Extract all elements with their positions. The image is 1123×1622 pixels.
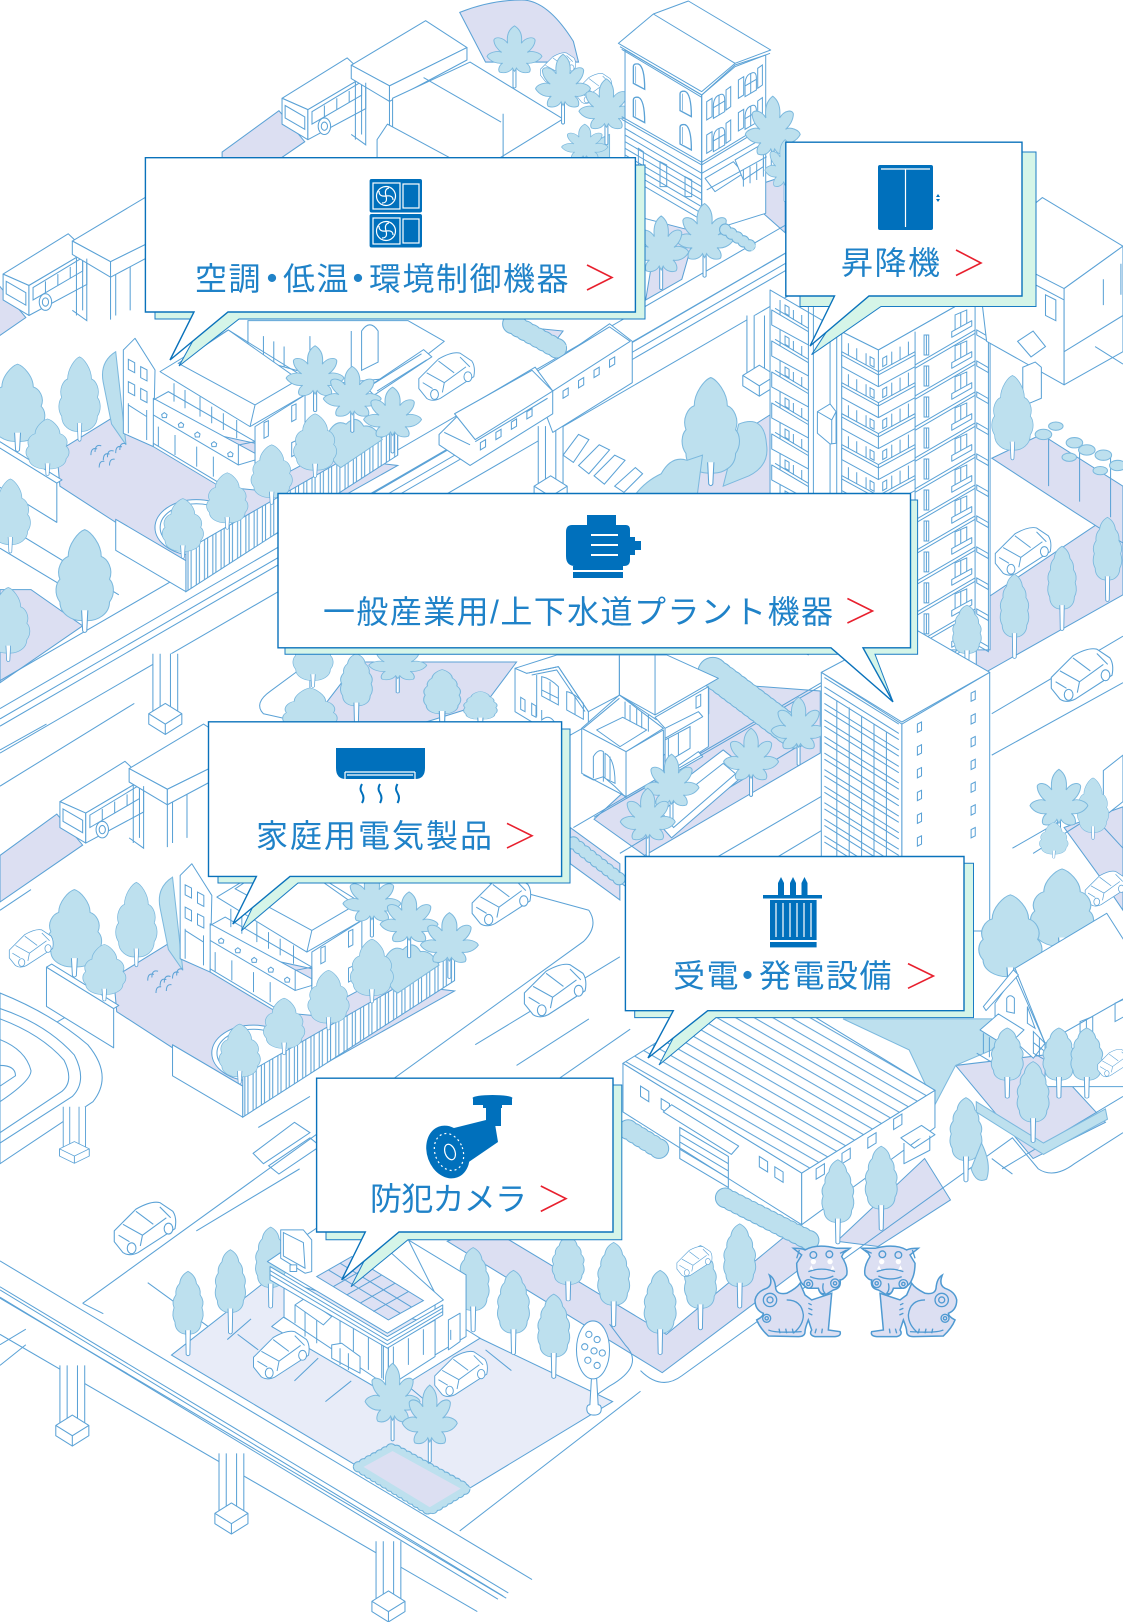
arrow bbox=[507, 823, 532, 848]
icon: transformer bbox=[763, 877, 822, 947]
icon: motor bbox=[566, 515, 641, 578]
small lot with maples bbox=[620, 697, 826, 856]
label: air conditioning: ・ bbox=[342, 261, 376, 297]
palm trees bbox=[1035, 422, 1123, 517]
callout: home appliances bbox=[208, 722, 570, 931]
icon: outdoor AC units bbox=[370, 179, 422, 248]
big tree bbox=[635, 378, 767, 494]
callout: security cameras bbox=[317, 1078, 622, 1287]
top cluster buildings bbox=[377, 26, 634, 171]
lower left bus and block bbox=[0, 724, 245, 902]
label: industrial equipment: 一般産業用/上下水道プラント機器 bbox=[323, 594, 833, 630]
left edge trees bbox=[0, 479, 113, 662]
residential tower lower bbox=[821, 626, 990, 931]
arrow bbox=[847, 598, 872, 623]
icon: elevator doors bbox=[878, 165, 940, 230]
label: power equipment: 受電 bbox=[673, 958, 740, 994]
convenience store lot bbox=[171, 1210, 756, 1512]
label: power equipment: ・ bbox=[732, 958, 765, 994]
right mid house bbox=[979, 755, 1123, 987]
callout: industrial and water plant equipment bbox=[278, 494, 918, 702]
residential tower upper bbox=[770, 290, 990, 697]
upper left bus and block bbox=[0, 197, 188, 374]
icon: security camera bbox=[419, 1095, 512, 1185]
label: power equipment: 発電設備 bbox=[759, 958, 893, 994]
label: elevators: 昇降機 bbox=[841, 245, 942, 281]
shisa lion statues bbox=[755, 1246, 957, 1337]
crosswalk bbox=[563, 434, 643, 492]
ring road viaduct bbox=[0, 993, 102, 1164]
hedge mid bbox=[713, 672, 795, 734]
pillars bbox=[56, 315, 776, 1622]
label: security cameras: 防犯カメラ bbox=[370, 1181, 527, 1217]
top cluster: bus and stop bbox=[222, 21, 467, 199]
highway bottom bbox=[0, 1261, 532, 1612]
victorian building bbox=[618, 1, 771, 233]
warehouse bbox=[623, 981, 1000, 1244]
elevated train bbox=[439, 324, 632, 465]
callout: elevators bbox=[786, 142, 1036, 355]
icon: wall air conditioner bbox=[336, 748, 425, 803]
arrow bbox=[956, 250, 981, 276]
block lower left bbox=[46, 855, 478, 1117]
label: air conditioning: 空調 bbox=[195, 261, 262, 297]
church building bbox=[248, 321, 474, 400]
hedge bbox=[512, 230, 754, 352]
road lines bbox=[0, 219, 795, 753]
label: home appliances: 家庭用電気製品 bbox=[256, 818, 494, 854]
callout: air conditioning and environment control bbox=[145, 158, 645, 366]
mid left trees behind callout bbox=[260, 626, 497, 739]
right side trees and car bbox=[953, 517, 1122, 701]
right lower house bbox=[976, 913, 1123, 1154]
label: air conditioning: 環境制御機器 bbox=[369, 261, 570, 297]
arrow bbox=[541, 1186, 566, 1211]
right houses bbox=[976, 198, 1123, 460]
arrow bbox=[908, 964, 933, 988]
label: air conditioning: ・ bbox=[256, 261, 290, 297]
label: air conditioning: 低温 bbox=[283, 261, 350, 297]
store building bbox=[267, 1210, 480, 1395]
block upper left bbox=[0, 330, 422, 592]
central house bbox=[515, 655, 718, 798]
callout: power receiving and generation equipment bbox=[625, 856, 974, 1065]
arrow bbox=[587, 265, 612, 290]
